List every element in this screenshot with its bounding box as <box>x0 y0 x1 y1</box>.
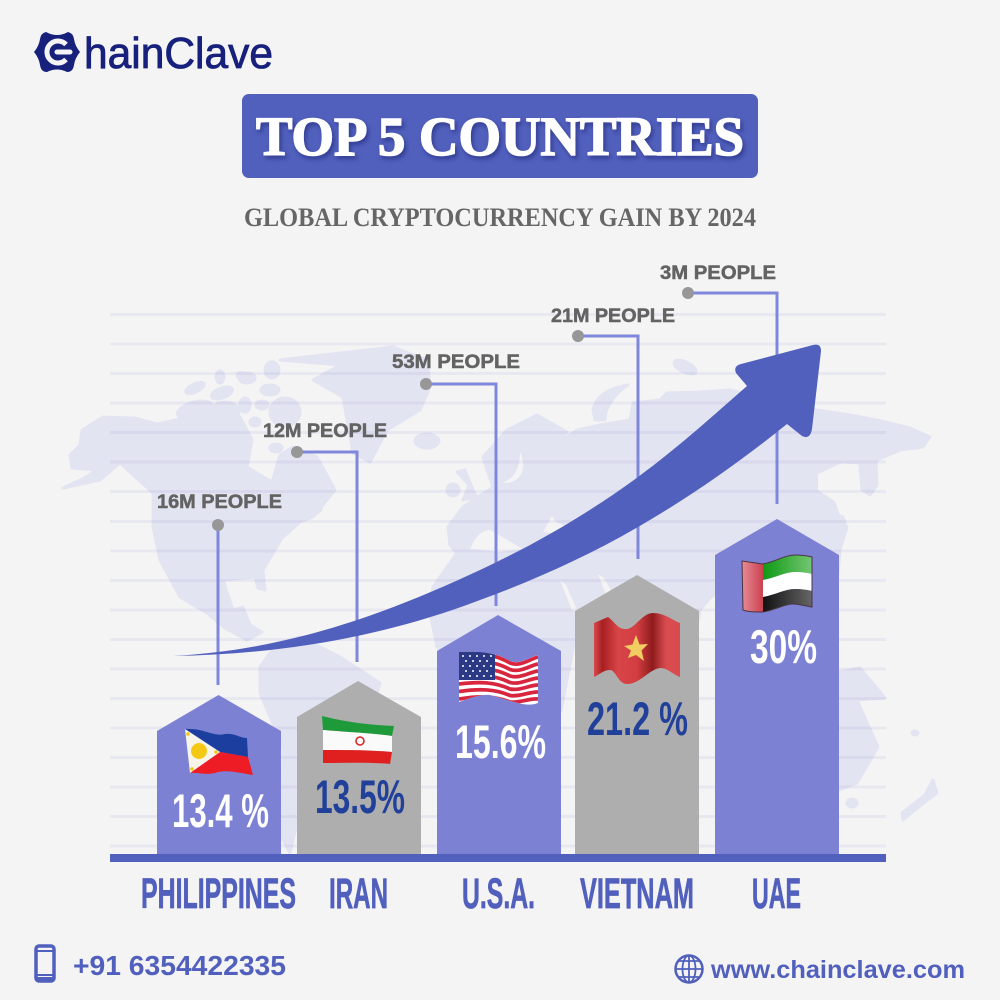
value: 21.2 %: 21.2 % <box>587 692 688 745</box>
callout labels: 53M PEOPLE <box>392 351 520 373</box>
bar: UAE <box>715 519 839 854</box>
map: Ireland <box>447 484 459 496</box>
value: 13.5%: 13.5% <box>315 770 405 823</box>
icon: phone <box>36 946 54 982</box>
phone number: +91 6354422335 <box>73 950 286 981</box>
map: Australia <box>838 668 885 790</box>
country labels: IRAN <box>329 870 388 918</box>
logo <box>34 29 273 78</box>
flag: Vietnam <box>594 613 680 684</box>
map: North America <box>63 412 335 640</box>
callout labels: 12M PEOPLE <box>263 420 387 442</box>
baseline bar <box>110 854 886 862</box>
icon: ChainClave gear <box>34 32 80 72</box>
bar: USA <box>437 615 561 854</box>
value: 13.4 %: 13.4 % <box>172 784 269 837</box>
callout labels: 16M PEOPLE <box>157 491 282 513</box>
callout labels: 3M PEOPLE <box>660 262 776 284</box>
map: Sakhalin and Japan <box>860 462 877 495</box>
map: Eurasia and Africa <box>430 390 930 790</box>
value: 15.6%: 15.6% <box>455 715 546 768</box>
map: Britain <box>457 470 477 500</box>
map: Greenland <box>280 347 430 462</box>
contact: phone <box>36 946 286 982</box>
subtitle: GLOBAL CRYPTOCURRENCY GAIN BY 2024 <box>244 203 756 232</box>
country labels: U.S.A. <box>462 870 535 918</box>
flag: Iran <box>322 716 394 764</box>
website url: www.chainclave.com <box>710 956 965 984</box>
flag: UAE <box>742 555 812 612</box>
callout leader lines <box>218 293 777 685</box>
map: Svalbard and Novaya Zemlya <box>593 385 628 420</box>
world map backdrop <box>63 347 937 853</box>
title: TOP 5 COUNTRIES <box>256 106 744 167</box>
flag: Philippines <box>185 729 253 775</box>
country labels <box>141 870 801 918</box>
map: South America <box>260 637 380 853</box>
callout labels: 21M PEOPLE <box>551 305 675 327</box>
map: New Zealand <box>902 780 937 820</box>
bar: Philippines <box>157 695 281 854</box>
title banner <box>242 94 758 178</box>
country labels: UAE <box>752 870 801 918</box>
horizontal grid lines <box>110 314 886 846</box>
map: Arctic islands <box>176 362 321 514</box>
map: Iceland <box>415 434 439 448</box>
growth arrow <box>173 345 821 656</box>
value: 30%: 30% <box>750 620 817 673</box>
callout labels <box>157 262 776 513</box>
callout dots <box>212 287 694 531</box>
flag: USA <box>459 652 538 705</box>
country labels: PHILIPPINES <box>141 870 296 918</box>
icon: globe <box>676 955 702 983</box>
bar: Iran <box>297 681 421 854</box>
map: sea cutouts <box>470 452 850 615</box>
country labels: VIETNAM <box>580 870 694 918</box>
logo wordmark: hainClave <box>84 29 273 78</box>
bar: Vietnam <box>575 575 699 854</box>
contact: website <box>676 955 965 984</box>
